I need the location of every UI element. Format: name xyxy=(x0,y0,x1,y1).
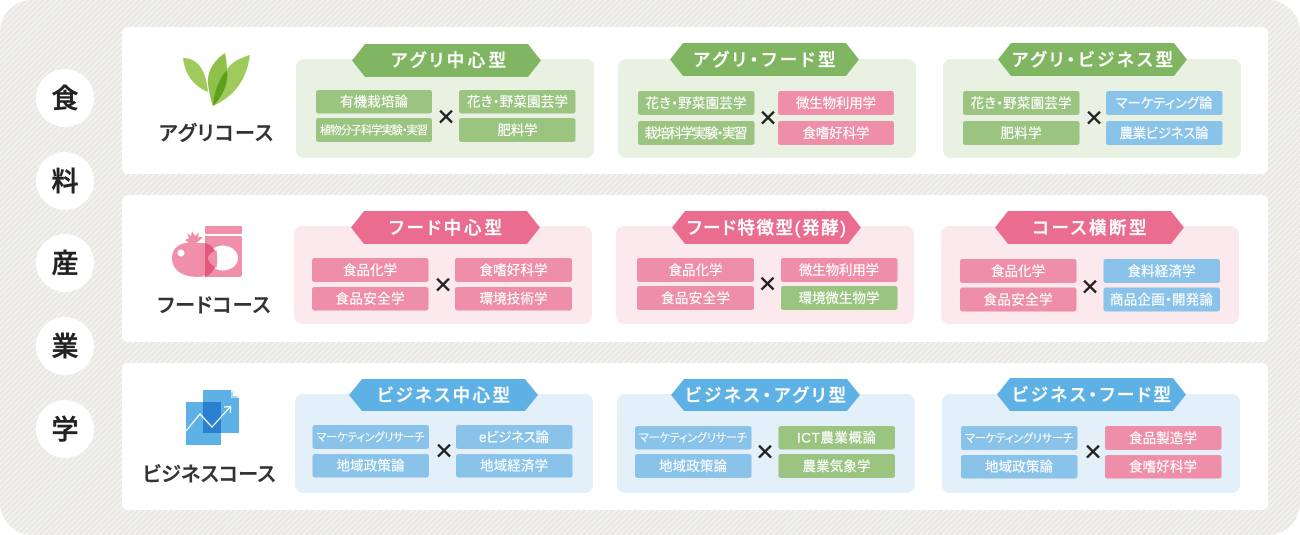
course: 農業気象学 xyxy=(778,454,895,478)
course: 食品製造学 xyxy=(1105,426,1222,450)
banner: コース横断型 xyxy=(1032,218,1146,238)
title character 学: 学 xyxy=(52,415,78,445)
course: 食品化学: 食品化学 xyxy=(991,264,1045,279)
banner xyxy=(997,378,1186,411)
course: 食嗜好科学 xyxy=(455,258,572,282)
title character 食 xyxy=(36,69,94,127)
panel: コース横断型 xyxy=(941,211,1239,324)
course: マーケティングリサーチ: マーケティングリサーチ xyxy=(639,430,747,444)
banner: ビジネス中心型 xyxy=(377,385,510,405)
course: 食品化学: 食品化学 xyxy=(668,263,722,278)
course: eビジネス論: eビジネス論 xyxy=(479,429,550,445)
course: 花き・野菜園芸学: 花き・野菜園芸学 xyxy=(970,96,1072,111)
icon: documents with rising chart xyxy=(186,390,239,445)
banner: ビジネス・アグリ型 xyxy=(685,385,846,405)
course: 地域政策論 xyxy=(961,455,1078,478)
icon: tomato and jar xyxy=(172,226,242,277)
course: 地域経済学: 地域経済学 xyxy=(480,458,548,473)
title character 業 xyxy=(36,317,94,375)
course: マーケティングリサーチ: マーケティングリサーチ xyxy=(965,431,1073,445)
banner xyxy=(995,211,1184,244)
multiply sign: × xyxy=(1084,436,1102,468)
title character 食: 食 xyxy=(52,84,78,114)
course: 花き・野菜園芸学 xyxy=(459,90,576,114)
course: 環境微生物学: 環境微生物学 xyxy=(798,291,880,306)
course: 地域政策論 xyxy=(312,454,429,478)
course: 食品安全学: 食品安全学 xyxy=(336,291,404,306)
course: 食品化学: 食品化学 xyxy=(343,263,397,278)
row: food course xyxy=(122,195,1268,342)
banner: フード特徴型(発酵) xyxy=(687,218,846,238)
label: アグリコース: アグリコース xyxy=(159,122,273,145)
course: 農業気象学: 農業気象学 xyxy=(802,459,870,474)
banner: アグリ中心型 xyxy=(391,50,506,70)
course: 食嗜好科学: 食嗜好科学 xyxy=(802,126,870,141)
banner xyxy=(349,379,538,411)
banner xyxy=(671,379,860,411)
course: 地域政策論: 地域政策論 xyxy=(985,458,1054,474)
course: 食品安全学 xyxy=(960,288,1076,312)
course: 微生物利用学: 微生物利用学 xyxy=(796,96,876,111)
banner: フード中心型 xyxy=(389,218,502,238)
title character 学 xyxy=(36,400,94,458)
course: 商品企画・開発論 xyxy=(1104,288,1220,312)
multiply sign: × xyxy=(437,100,455,134)
course: eビジネス論 xyxy=(456,425,572,449)
banner xyxy=(352,44,541,77)
course: 食品安全学 xyxy=(637,286,754,310)
multiply sign: × xyxy=(1081,270,1099,304)
course: 地域経済学 xyxy=(456,454,572,478)
title character 料 xyxy=(36,152,94,210)
banner: アグリ・フード型 xyxy=(694,50,836,70)
course: 食品製造学: 食品製造学 xyxy=(1129,431,1197,446)
panel: アグリ中心型 xyxy=(296,44,594,158)
course: 地域政策論: 地域政策論 xyxy=(336,457,405,473)
banner xyxy=(670,43,859,76)
panel: アグリ・フード型 xyxy=(618,43,916,158)
course: 植物分子科学実験・実習: 植物分子科学実験・実習 xyxy=(320,123,428,137)
label: フードコース: フードコース xyxy=(158,295,271,317)
multiply sign: × xyxy=(756,436,774,468)
course: 有機栽培論 xyxy=(316,90,432,114)
course: 地域政策論 xyxy=(635,454,752,478)
course: 栽培科学実験・実習: 栽培科学実験・実習 xyxy=(644,126,748,141)
course: 環境微生物学 xyxy=(781,286,898,310)
row: agri course xyxy=(122,27,1268,174)
course: 微生物利用学: 微生物利用学 xyxy=(799,263,879,278)
course: 食嗜好科学: 食嗜好科学 xyxy=(480,263,548,278)
course: 微生物利用学 xyxy=(778,91,894,115)
course: 有機栽培論: 有機栽培論 xyxy=(340,93,408,109)
banner xyxy=(672,211,861,244)
course: ICT農業概論: ICT農業概論 xyxy=(797,429,876,445)
title character 業: 業 xyxy=(52,332,78,362)
multiply sign: × xyxy=(435,434,453,468)
course: 肥料学: 肥料学 xyxy=(1000,126,1042,141)
course: マーケティング論: マーケティング論 xyxy=(1116,95,1213,111)
panel: ビジネス中心型 xyxy=(295,379,593,493)
title character 産: 産 xyxy=(52,249,78,279)
course: 商品企画・開発論: 商品企画・開発論 xyxy=(1110,291,1214,307)
title character 料: 料 xyxy=(52,167,78,197)
course: 食品化学 xyxy=(960,259,1076,283)
course: マーケティング論 xyxy=(1106,91,1222,115)
panel: フード中心型 xyxy=(294,211,592,324)
course: ICT農業概論 xyxy=(778,426,895,450)
course: 花き・野菜園芸学: 花き・野菜園芸学 xyxy=(646,96,746,111)
panel: フード特徴型(発酵) xyxy=(616,211,914,324)
course: 食料経済学: 食料経済学 xyxy=(1128,264,1196,279)
icon: leaves xyxy=(183,53,250,106)
course: 食料経済学 xyxy=(1104,259,1220,283)
course: 食品化学 xyxy=(637,258,754,282)
course: マーケティングリサーチ xyxy=(961,426,1078,450)
course: マーケティングリサーチ xyxy=(312,425,429,449)
course: 花き・野菜園芸学: 花き・野菜園芸学 xyxy=(467,94,568,109)
course: 植物分子科学実験・実習 xyxy=(316,118,432,142)
course: 農業ビジネス論: 農業ビジネス論 xyxy=(1120,125,1209,141)
course: 環境技術学 xyxy=(455,287,572,310)
course: 肥料学: 肥料学 xyxy=(498,123,538,138)
vertical title: 食料産業学 xyxy=(36,69,94,458)
course: 栽培科学実験・実習 xyxy=(638,121,754,145)
banner: アグリ・ビジネス型 xyxy=(1012,50,1173,70)
multiply sign: × xyxy=(434,268,452,302)
course: 農業ビジネス論 xyxy=(1106,121,1222,145)
course: 食嗜好科学: 食嗜好科学 xyxy=(1129,459,1197,474)
multiply sign: × xyxy=(1085,102,1103,134)
banner: ビジネス・フード型 xyxy=(1012,385,1171,405)
course: マーケティングリサーチ xyxy=(635,426,752,450)
course: 環境技術学: 環境技術学 xyxy=(480,291,548,306)
course: 肥料学 xyxy=(459,118,576,142)
panel: ビジネス・アグリ型 xyxy=(617,379,915,493)
row: business course xyxy=(122,363,1268,510)
panel: ビジネス・フード型 xyxy=(942,378,1240,493)
course: 花き・野菜園芸学 xyxy=(963,91,1080,115)
multiply sign: × xyxy=(759,102,777,134)
course: 食品安全学 xyxy=(312,287,428,310)
multiply sign: × xyxy=(759,268,776,300)
panel: アグリ・ビジネス型 xyxy=(943,43,1241,158)
course: 食嗜好科学 xyxy=(778,121,894,145)
course: 食品安全学: 食品安全学 xyxy=(661,291,730,306)
course: 地域政策論: 地域政策論 xyxy=(659,458,728,474)
banner xyxy=(998,43,1187,76)
course: 食嗜好科学 xyxy=(1105,455,1222,478)
banner xyxy=(351,211,540,244)
title character 産 xyxy=(36,234,94,292)
course: 食品化学 xyxy=(312,258,428,282)
course: 食品安全学: 食品安全学 xyxy=(984,292,1052,307)
course: マーケティングリサーチ: マーケティングリサーチ xyxy=(316,430,425,444)
course: 花き・野菜園芸学 xyxy=(638,91,754,115)
course: 微生物利用学 xyxy=(781,258,898,282)
course: 肥料学 xyxy=(963,121,1080,145)
label: ビジネスコース: ビジネスコース xyxy=(142,463,276,486)
